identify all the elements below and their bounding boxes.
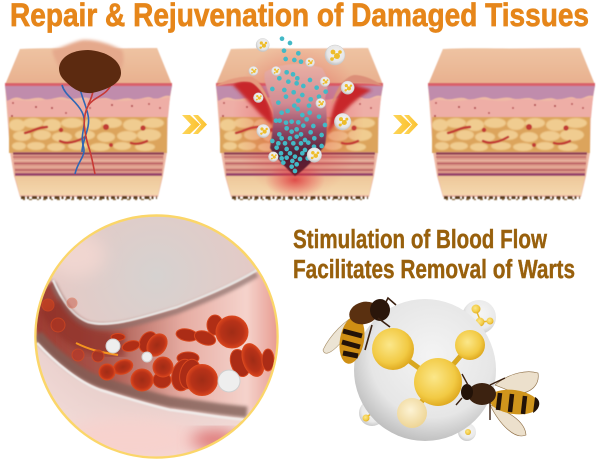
blood vessel circle	[30, 216, 285, 462]
skin block: wart	[5, 40, 172, 200]
right lip	[332, 74, 382, 102]
arrow: first chevrons	[182, 115, 207, 134]
veins	[62, 78, 112, 174]
bonds	[393, 345, 470, 413]
arrow: second chevrons	[393, 115, 418, 134]
subheading: Stimulation of Blood Flow	[293, 226, 547, 254]
vessel lower wall	[37, 335, 247, 412]
teal molecules	[270, 36, 328, 173]
vessel	[30, 270, 285, 417]
wound glow	[239, 48, 358, 190]
red blood cells	[42, 298, 274, 396]
left dark cells	[50, 305, 125, 345]
red left wound	[233, 80, 274, 126]
bee: lower right	[456, 372, 540, 436]
skin block: treatment	[216, 36, 383, 200]
large bubble	[354, 299, 496, 441]
molecule bubble	[354, 299, 496, 441]
white blood cells	[106, 339, 240, 392]
bee: upper left	[323, 298, 396, 366]
subheading	[293, 226, 575, 284]
crater	[264, 64, 328, 176]
wart	[59, 50, 121, 93]
vessel upper wall	[53, 274, 257, 328]
gold molecule bubbles	[249, 38, 354, 162]
raised skin above wart	[52, 40, 124, 80]
skin block: healed	[428, 48, 595, 200]
gold spheres	[372, 328, 414, 370]
small bubbles	[462, 300, 496, 334]
red right wound	[327, 84, 372, 134]
left lip	[217, 77, 274, 116]
